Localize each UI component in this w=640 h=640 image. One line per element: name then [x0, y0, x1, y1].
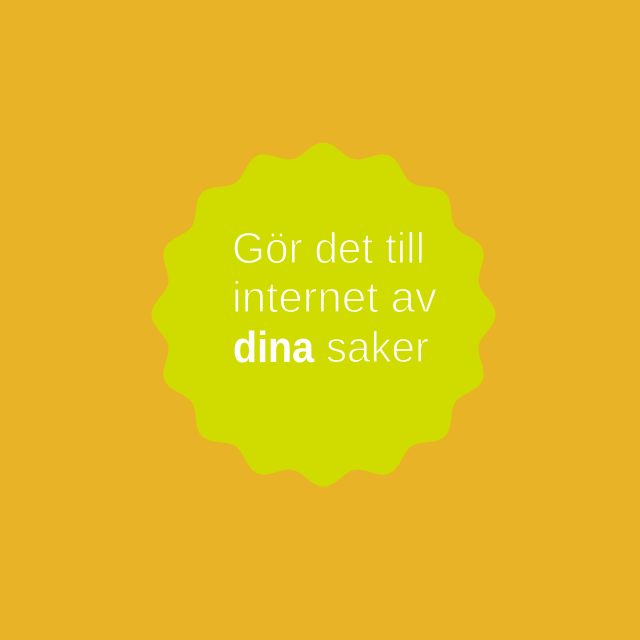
headline text: dina — [233, 323, 314, 372]
headline text — [232, 224, 437, 372]
headline text: saker — [326, 323, 429, 372]
wavy badge — [152, 142, 496, 486]
headline text: Gör det till — [232, 224, 425, 273]
headline text: internet av — [232, 273, 437, 322]
